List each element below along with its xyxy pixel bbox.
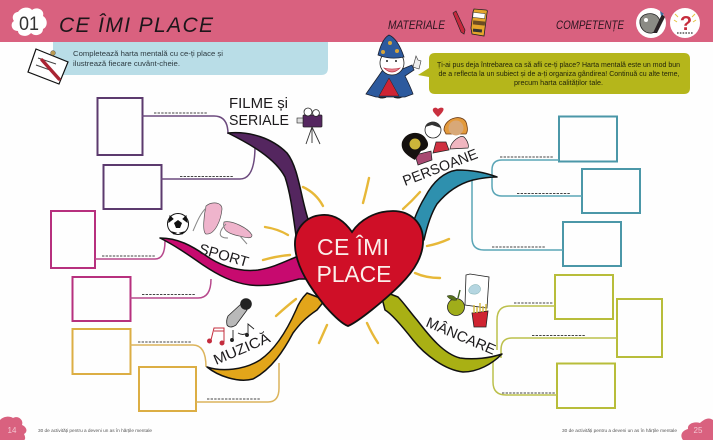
icon: red notes (208, 328, 224, 345)
icon: pinned note with pencil (28, 49, 68, 84)
label: PERSOANE (401, 146, 480, 190)
label: SERIALE (229, 113, 289, 129)
sun rays around the heart (263, 178, 449, 343)
connectors (472, 160, 582, 250)
right page number (681, 418, 713, 440)
speech bubble (418, 53, 690, 94)
central heart (295, 211, 423, 326)
label: MÂNCARE (423, 314, 498, 359)
icon: apple (447, 290, 464, 316)
wizard face (380, 51, 404, 75)
speech bubble: Ți-ai pus deja întrebarea ca să afli ce-ți place? Harta mentală este un mod bun (437, 62, 680, 69)
frames (72, 329, 196, 411)
instruction panel: Completează harta mentală cu ce-ți place și (73, 49, 223, 58)
purple branch (228, 133, 315, 250)
icon: football (168, 214, 188, 234)
magenta branch (160, 238, 306, 286)
branch group: music (72, 293, 325, 411)
connectors (142, 116, 255, 179)
frames (559, 116, 640, 266)
icon: film camera (297, 108, 322, 144)
chapter number badge: 01 (19, 14, 39, 35)
instruction panel: ilustrează fiecare cuvânt-cheie. (73, 59, 180, 68)
instruction panel (53, 42, 328, 75)
teal branch (412, 170, 497, 240)
connectors (493, 306, 617, 395)
icon: palette (636, 8, 666, 38)
icon: friends (402, 108, 468, 165)
right footer text: 30 de activități pentru a deveni un as în hărțile mentale (562, 428, 678, 433)
answer lines (502, 303, 585, 393)
label: FILME și (229, 96, 288, 112)
branch group: films and series (98, 96, 322, 250)
left footer text: 30 de activități pentru a deveni un as în hărțile mentale (38, 428, 153, 433)
branch group: sport (51, 203, 306, 321)
icon: fries (472, 303, 488, 327)
icon: milk carton (465, 274, 489, 308)
answer lines (492, 157, 571, 247)
wizard cloak (366, 65, 414, 97)
competences label: COMPETENȚE (556, 20, 624, 32)
icon: question mark (670, 8, 700, 38)
green branch (380, 290, 502, 372)
girl with orange hair (444, 118, 468, 149)
icon: microphone (227, 298, 252, 327)
speech bubble: de a reflecta la un subiect și de a-ți organiza gândirea! Continuă cu alte teme, (438, 71, 680, 78)
gold branch (207, 293, 325, 380)
wizard hat (378, 35, 404, 58)
frames (98, 98, 162, 209)
wizard dress (379, 78, 399, 96)
central heart: PLACE (316, 261, 392, 287)
label: SPORT (197, 241, 250, 271)
answer lines (102, 256, 195, 294)
icon: red pencil (453, 11, 465, 34)
girl with dark hair (402, 133, 432, 165)
speech bubble: precum harta calităților tale. (514, 80, 603, 87)
header band (0, 0, 713, 42)
branch group: food (380, 274, 662, 408)
boy (425, 122, 449, 153)
frames (51, 211, 130, 321)
heart (433, 108, 444, 117)
branch group: people (401, 108, 640, 266)
answer lines (154, 113, 234, 176)
connectors (130, 345, 279, 402)
frames (555, 275, 662, 408)
wizard feet (376, 95, 404, 98)
icon: black notes (230, 324, 254, 342)
connectors (95, 241, 211, 298)
answer lines (138, 342, 261, 399)
icon: question mark: ? (680, 13, 692, 35)
central heart: CE ÎMI (317, 234, 389, 260)
label: MUZICĂ (211, 329, 273, 369)
icon: jar (471, 9, 487, 36)
right page number: 25 (694, 426, 703, 435)
title: CE ÎMI PLACE (59, 14, 214, 37)
wizard hand (413, 56, 421, 69)
icon: ballet shoes (193, 203, 252, 244)
chapter number badge (12, 8, 47, 36)
left page number (0, 417, 26, 440)
wizard character (366, 35, 421, 98)
label (229, 96, 289, 129)
left page number: 14 (8, 426, 17, 435)
materials label: MATERIALE (388, 20, 445, 32)
